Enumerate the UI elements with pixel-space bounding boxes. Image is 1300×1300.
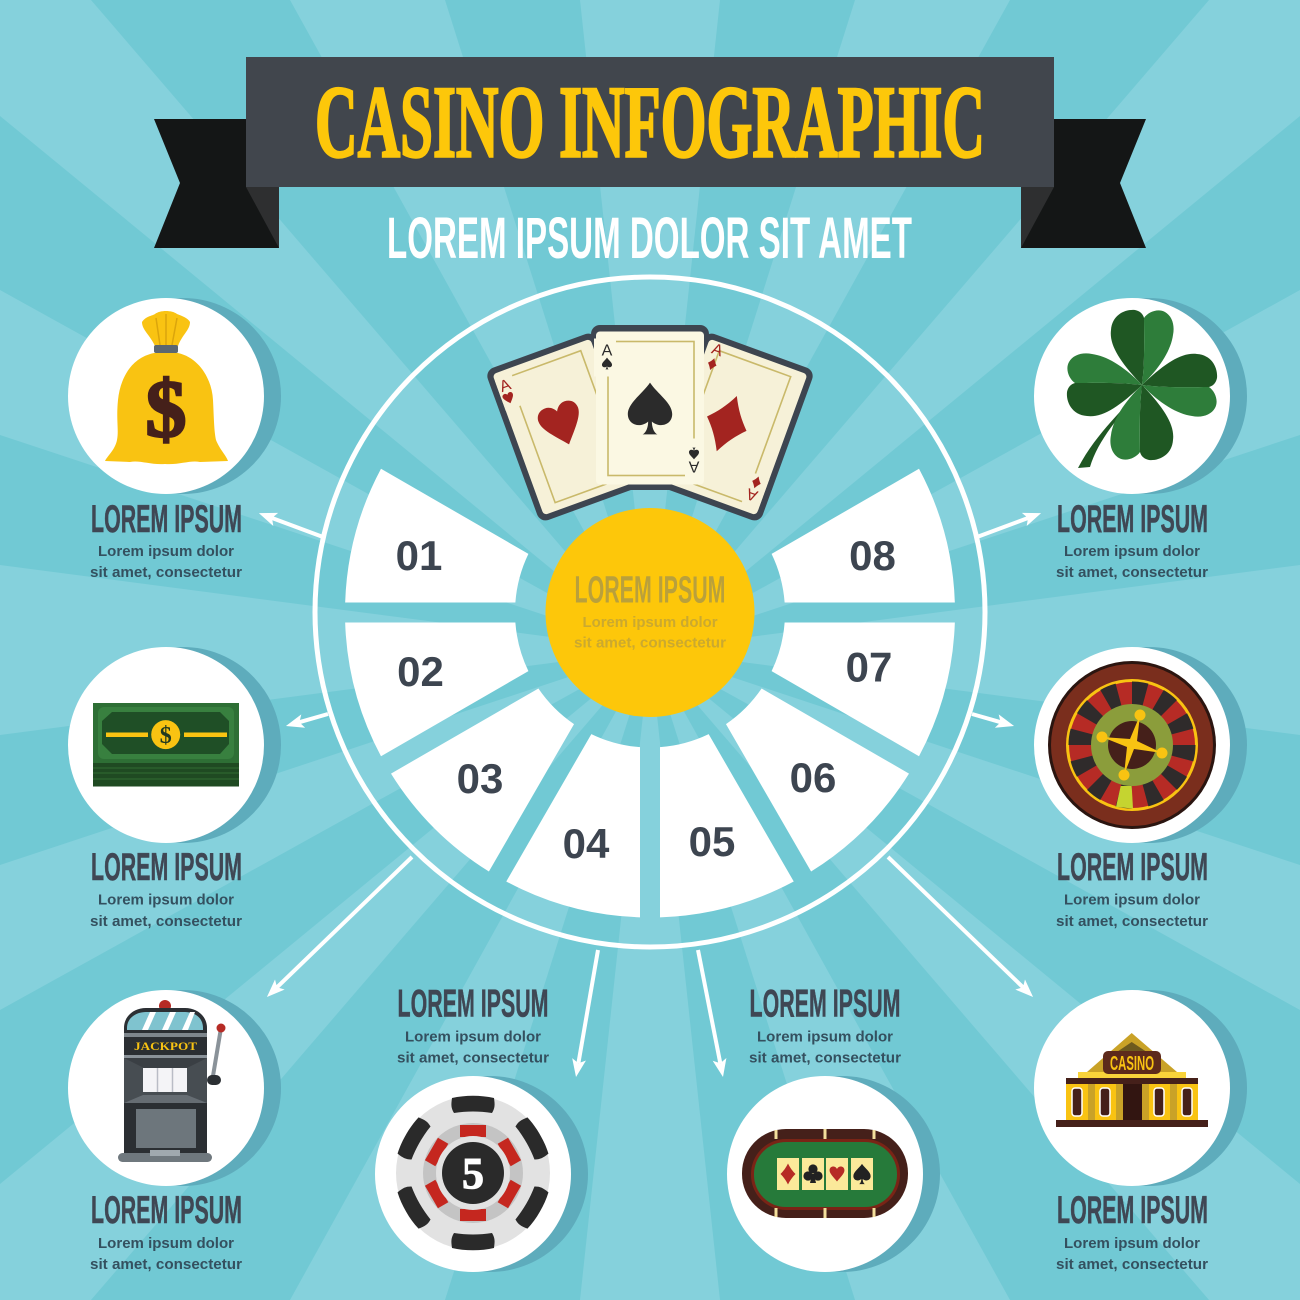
label: sit amet, consectetur xyxy=(397,1050,549,1066)
right ribbon tail xyxy=(1021,119,1146,248)
label: Lorem ipsum dolor xyxy=(757,1028,893,1046)
label: LOREM IPSUM xyxy=(750,982,900,1026)
icon disc xyxy=(68,990,281,1186)
icon disc xyxy=(1034,298,1247,494)
segment 03 xyxy=(391,688,574,872)
hub text xyxy=(574,614,726,652)
ace of spades xyxy=(594,332,704,484)
icon disc xyxy=(1034,647,1247,843)
label: LOREM IPSUM xyxy=(91,846,242,889)
icon: clover xyxy=(1067,310,1217,468)
segment 07: 07 xyxy=(846,644,892,690)
segment 01 xyxy=(345,469,528,602)
label xyxy=(90,1189,242,1273)
icon: casino building: CASINO xyxy=(1110,1053,1154,1075)
ace of diamonds: A xyxy=(744,484,760,504)
icon disc xyxy=(375,1076,588,1272)
label: LOREM IPSUM xyxy=(91,498,242,541)
label: Lorem ipsum dolor xyxy=(1064,1235,1200,1252)
segment 05 xyxy=(660,734,794,917)
segment 08 xyxy=(772,469,955,602)
segment 02: 02 xyxy=(397,648,444,695)
segment 02 xyxy=(345,622,528,756)
icon: roulette xyxy=(1048,661,1216,829)
label: LOREM IPSUM xyxy=(398,982,548,1026)
subtitle: LOREM IPSUM DOLOR SIT AMET xyxy=(387,206,912,271)
label xyxy=(397,982,549,1066)
label xyxy=(90,846,242,930)
segment 01: 01 xyxy=(396,532,442,579)
label: Lorem ipsum dolor xyxy=(98,543,234,560)
icon disc xyxy=(727,1076,940,1272)
label: sit amet, consectetur xyxy=(90,1256,242,1273)
segment 04 xyxy=(506,734,640,917)
item: slot machine xyxy=(68,990,281,1273)
left ribbon tail xyxy=(154,119,279,248)
label: sit amet, consectetur xyxy=(1056,564,1208,581)
numbered wheel segments xyxy=(345,469,955,917)
label: LOREM IPSUM xyxy=(91,1189,242,1232)
icon: jackpot slot machine xyxy=(118,1000,226,1162)
icon disc xyxy=(1034,990,1247,1186)
ace of hearts xyxy=(492,339,642,515)
label: Lorem ipsum dolor xyxy=(98,892,234,908)
item: four-leaf clover xyxy=(1034,298,1247,581)
banner band xyxy=(246,57,1054,187)
icon: money bag: $ xyxy=(146,363,186,454)
central wheel ring xyxy=(315,277,985,947)
segment 03: 03 xyxy=(457,755,503,802)
label xyxy=(1056,846,1208,930)
card outlines xyxy=(485,325,815,523)
item: casino building xyxy=(1034,990,1247,1273)
label: sit amet, consectetur xyxy=(749,1050,901,1066)
icon: casino building xyxy=(1056,1033,1208,1127)
ace of spades: A xyxy=(688,458,699,474)
ace of spades: A xyxy=(602,342,613,360)
icon: three aces fan xyxy=(485,325,815,523)
title banner xyxy=(154,57,1146,248)
ace of diamonds xyxy=(658,339,808,515)
icon: poker table xyxy=(742,1129,908,1218)
segment 04: 04 xyxy=(563,820,610,867)
label xyxy=(1056,498,1208,581)
label: sit amet, consectetur xyxy=(90,564,242,581)
label xyxy=(1056,1189,1208,1273)
segment 06: 06 xyxy=(790,754,836,801)
ace of diamonds: A xyxy=(709,341,725,360)
label: sit amet, consectetur xyxy=(1056,913,1208,930)
item: poker table xyxy=(727,982,940,1272)
icon: jackpot slot machine: JACKPOT xyxy=(134,1041,197,1053)
label: Lorem ipsum dolor xyxy=(1064,543,1200,560)
icon: banknotes: $ xyxy=(160,723,172,749)
hub text: sit amet, consectetur xyxy=(574,634,726,652)
label: sit amet, consectetur xyxy=(1056,1256,1208,1273)
hub heading: LOREM IPSUM xyxy=(574,570,726,612)
item: poker chip xyxy=(375,982,588,1272)
item: cash stack xyxy=(68,647,281,930)
segment 05: 05 xyxy=(689,818,735,865)
segment 08: 08 xyxy=(849,532,896,579)
label: Lorem ipsum dolor xyxy=(1064,892,1200,908)
item: roulette wheel xyxy=(1034,647,1247,930)
icon: money bag xyxy=(105,311,228,464)
hub text: Lorem ipsum dolor xyxy=(582,614,718,631)
segment 07 xyxy=(772,622,955,756)
icon: banknotes xyxy=(93,703,239,786)
icon disc xyxy=(68,298,281,494)
label: Lorem ipsum dolor xyxy=(405,1028,541,1046)
ace of hearts: A xyxy=(497,376,514,396)
label: sit amet, consectetur xyxy=(90,913,242,930)
icon: poker chip: 5 xyxy=(462,1149,484,1198)
label xyxy=(90,498,242,581)
item: money bag xyxy=(68,298,281,581)
label xyxy=(749,982,901,1066)
segment 06 xyxy=(726,688,909,872)
arrows xyxy=(272,518,1028,1063)
central yellow hub xyxy=(546,508,754,717)
icon disc xyxy=(68,647,281,843)
icon: poker chip xyxy=(395,1096,551,1250)
label: Lorem ipsum dolor xyxy=(98,1235,234,1252)
